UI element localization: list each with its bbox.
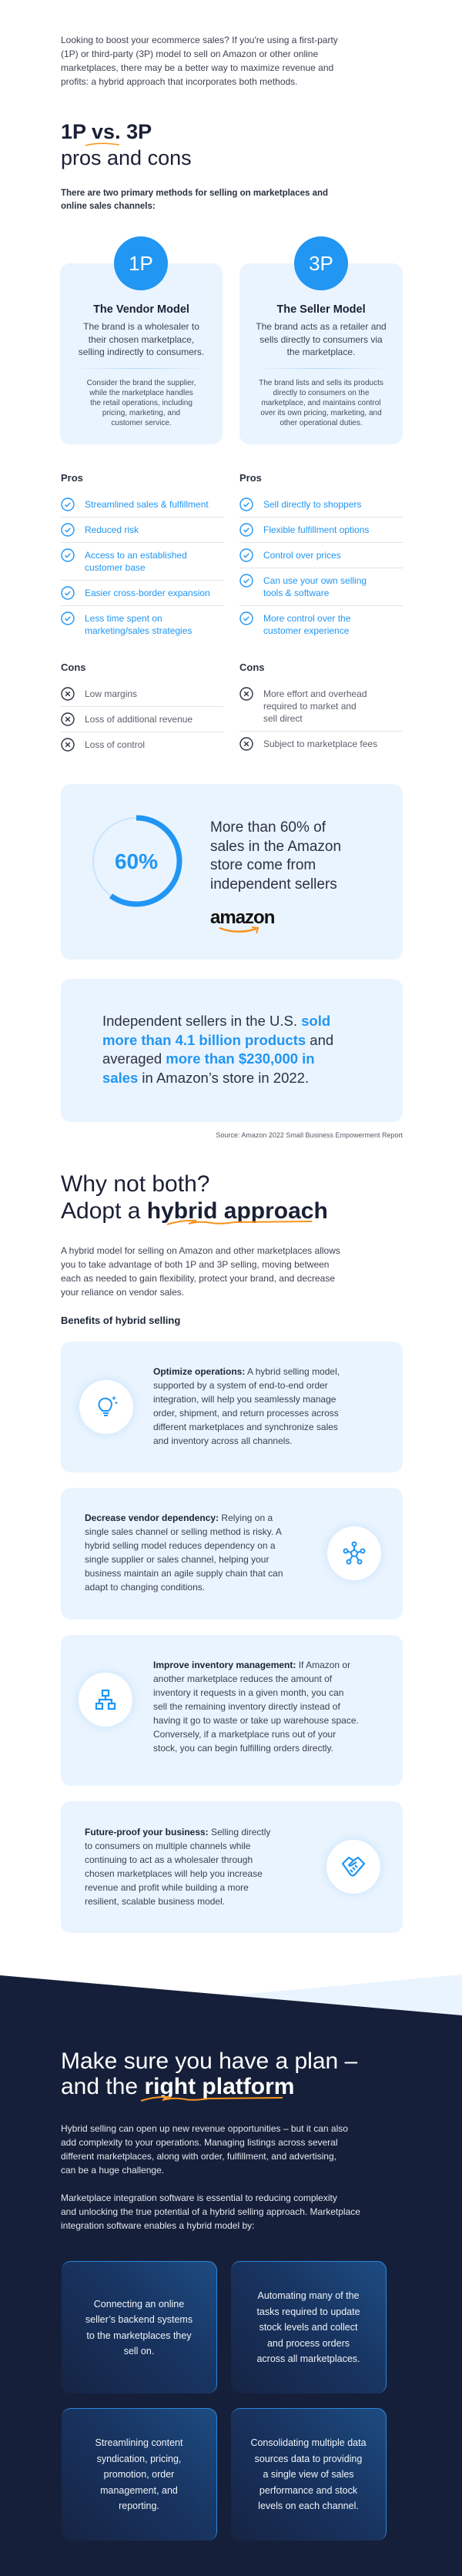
icon: hierarchy xyxy=(79,1673,132,1727)
card: automating tasks: Automating many of the xyxy=(257,2290,360,2301)
badge 1P: 1P xyxy=(129,252,153,275)
text: chosen marketplaces will help you increase xyxy=(85,1868,263,1879)
description: The brand is a wholesaler to xyxy=(83,321,199,332)
intro text: (1P) or third-party (3P) model to sell on Amazon or other online xyxy=(61,49,318,59)
pros list 1P: marketing/sales strategies xyxy=(85,625,192,636)
pros list 1P: Less time spent on xyxy=(85,613,162,624)
card: automating tasks: and process orders xyxy=(267,2338,350,2349)
heading: 1P vs 3P pros and cons: 1P vs. 3P xyxy=(61,120,152,143)
detail: while the marketplace handles xyxy=(89,389,193,397)
detail: the retail operations, including xyxy=(90,399,192,407)
card: consolidating data: sources data to providing xyxy=(255,2454,362,2464)
text: another marketplace reduces the amount of xyxy=(153,1673,332,1684)
stat text: More than 60% of xyxy=(210,819,326,836)
pros list 1P: Reduced risk xyxy=(85,524,139,535)
detail: marketplace, and maintains control xyxy=(261,399,381,407)
text: having it go to waste or take up warehouse space. xyxy=(153,1715,359,1726)
benefits heading: Benefits of hybrid selling xyxy=(61,1315,180,1326)
pros heading 1P: Pros xyxy=(61,472,83,484)
intro text: marketplaces, there may be a better way to maximize revenue and xyxy=(61,62,333,73)
stat card: 60% xyxy=(61,784,403,960)
heading: make sure you have a plan: Make sure you have a plan – xyxy=(61,2048,357,2074)
cons list 1P: Loss of additional revenue xyxy=(85,714,192,725)
description: The brand acts as a retailer and xyxy=(256,321,387,332)
hybrid paragraph: A hybrid model for selling on Amazon and other marketplaces allows xyxy=(61,1245,340,1256)
description: their chosen marketplace, xyxy=(89,334,194,345)
subheading xyxy=(61,189,328,211)
text: supported by a system of end-to-end order xyxy=(153,1380,328,1391)
card: automating tasks: across all marketplaces. xyxy=(256,2353,360,2364)
card: connecting backend: Connecting an online xyxy=(94,2298,184,2309)
detail xyxy=(87,379,196,427)
text xyxy=(85,1827,271,1907)
card: streamlining content: reporting. xyxy=(119,2501,159,2511)
cons heading 1P: Cons xyxy=(61,662,86,673)
cons list 3P: sell direct xyxy=(263,713,303,724)
dark paragraph 1: can be a huge challenge. xyxy=(61,2165,164,2176)
pros list 1P: Streamlined sales & fulfillment xyxy=(85,499,209,510)
text: single sales channel or selling method is risky. A xyxy=(85,1526,282,1537)
card: streamlining content: syndication, pricing, xyxy=(97,2454,181,2464)
detail: over its own pricing, marketing, and xyxy=(260,409,382,417)
squiggle under vs xyxy=(85,143,120,146)
pros list 3P: More control over the xyxy=(263,613,350,624)
text: revenue and profit while building a more xyxy=(85,1882,249,1893)
stat text: independent sellers xyxy=(210,876,337,892)
text: Decrease vendor dependency: Relying on a xyxy=(85,1512,273,1523)
icon: network hub xyxy=(327,1526,381,1580)
heading: make sure you have a plan: and the right platform xyxy=(61,2074,294,2099)
cons list 1P xyxy=(61,687,223,752)
card: consolidating data: performance and stock xyxy=(259,2485,357,2496)
intro text: Looking to boost your ecommerce sales? If you're using a first-party xyxy=(61,35,338,45)
pros list 1P: Access to an established xyxy=(85,550,187,561)
text: business maintain an agile supply chain that can xyxy=(85,1568,283,1579)
text: sell the remaining inventory directly instead of xyxy=(153,1701,340,1712)
card: streamlining content: promotion, order xyxy=(104,2469,174,2480)
text: inventory it requests in a given month, you can xyxy=(153,1687,343,1698)
dark section background xyxy=(0,1975,462,2576)
text: hybrid selling model reduces dependency on a xyxy=(85,1540,276,1551)
text: different marketplaces and synchronize sales xyxy=(153,1422,338,1432)
pros list 3P: Can use your own selling xyxy=(263,575,367,586)
subheading: online sales channels: xyxy=(61,202,156,211)
card: consolidating data: a single view of sales xyxy=(263,2469,354,2480)
text: to consumers on multiple channels while xyxy=(85,1841,250,1851)
card: streamlining content xyxy=(62,2408,217,2541)
text: Improve inventory management: If Amazon or xyxy=(153,1660,350,1670)
benefit card: optimize operations xyxy=(61,1342,403,1472)
icon: handshake xyxy=(326,1840,380,1894)
cons list 1P: Low margins xyxy=(85,688,137,699)
heading: why not both xyxy=(61,1171,328,1225)
intro text xyxy=(61,35,338,87)
panel: 3P seller model xyxy=(239,263,403,444)
description: selling indirectly to consumers. xyxy=(79,347,204,357)
card: connecting backend xyxy=(62,2261,217,2393)
card: streamlining content: Streamlining content xyxy=(95,2437,182,2448)
pros list 3P: Control over prices xyxy=(263,550,341,561)
pros list 3P: Sell directly to shoppers xyxy=(263,499,361,510)
panel: 1P vendor model xyxy=(60,263,223,444)
card: streamlining content: management, and xyxy=(100,2485,178,2496)
text: Optimize operations: A hybrid selling model, xyxy=(153,1366,340,1377)
badge 1P xyxy=(114,236,168,290)
stat card: independent sellers: more than 4.1 billion products and xyxy=(102,1032,333,1047)
card: consolidating data xyxy=(231,2408,387,2541)
text: resilient, scalable business model. xyxy=(85,1896,225,1907)
heading: 1P vs 3P pros and cons: pros and cons xyxy=(61,146,192,169)
stat text: sales in the Amazon xyxy=(210,838,341,855)
subheading: There are two primary methods for selling on marketplaces and xyxy=(61,189,328,198)
stat text: store come from xyxy=(210,857,316,873)
icon: lightbulb xyxy=(79,1380,133,1434)
heading: why not both: Why not both? xyxy=(61,1171,209,1197)
hybrid paragraph: each as needed to gain flexibility, protect your brand, and decrease xyxy=(61,1273,335,1284)
card: consolidating data: Consolidating multiple data xyxy=(250,2437,367,2448)
text: and inventory across all channels. xyxy=(153,1435,293,1446)
hybrid paragraph xyxy=(61,1245,340,1298)
pros list 3P: Flexible fulfillment options xyxy=(263,524,369,535)
dark paragraph 1: different marketplaces, along with order, fulfillment, and advertising, xyxy=(61,2151,336,2162)
dark paragraph 2 xyxy=(61,2192,360,2231)
text: Future-proof your business: Selling directly xyxy=(85,1827,270,1837)
cons heading 3P: Cons xyxy=(239,662,265,673)
heading: make sure you have a plan xyxy=(61,2048,357,2102)
detail: directly to consumers on the xyxy=(273,389,370,397)
dark paragraph 1: Hybrid selling can open up new revenue opportunities – but it can also xyxy=(61,2123,348,2134)
source note: Source: Amazon 2022 Small Business Empowerment Report xyxy=(216,1131,403,1139)
pros list 3P: customer experience xyxy=(263,625,349,636)
stat card: independent sellers: averaged more than $230,000 in xyxy=(102,1050,315,1067)
amazon logo: amazon xyxy=(210,907,274,928)
pros list 1P xyxy=(61,497,223,636)
text xyxy=(153,1660,359,1754)
text: adapt to changing conditions. xyxy=(85,1582,205,1593)
description: sells directly to consumers via xyxy=(259,334,383,345)
intro text: profits: a hybrid approach that incorporates both methods. xyxy=(61,76,298,87)
cons list 3P: required to market and xyxy=(263,701,357,712)
badge 3P: 3P xyxy=(309,252,333,275)
title: The Vendor Model xyxy=(93,303,189,316)
heading: 1P vs 3P pros and cons xyxy=(61,120,192,169)
description xyxy=(256,321,387,357)
card: connecting backend: to the marketplaces they xyxy=(86,2330,192,2341)
stat card: independent sellers xyxy=(61,979,403,1122)
text: stock, you can begin fulfilling orders directly. xyxy=(153,1743,333,1754)
card: automating tasks: stock levels and collect xyxy=(259,2322,357,2333)
pros list 1P: Easier cross-border expansion xyxy=(85,588,210,598)
cons list 3P: More effort and overhead xyxy=(263,688,367,699)
dark paragraph 2: Marketplace integration software is essential to reducing complexity xyxy=(61,2192,337,2203)
ring chart 60%: 60% xyxy=(115,849,158,873)
pros heading 3P: Pros xyxy=(239,472,262,484)
card: consolidating data: levels on each channel. xyxy=(258,2501,359,2511)
text: Conversely, if a marketplace runs out of your xyxy=(153,1729,336,1740)
benefit card: decrease vendor dependency xyxy=(61,1488,403,1620)
stat card: independent sellers: Independent sellers in the U.S. sold xyxy=(102,1013,330,1029)
stat text xyxy=(210,819,341,892)
detail: other operational duties. xyxy=(280,419,363,427)
detail: Consider the brand the supplier, xyxy=(87,379,196,387)
dark paragraph 1: add complexity to your operations. Managing listings across several xyxy=(61,2137,338,2148)
card: connecting backend: sell on. xyxy=(124,2346,154,2357)
squiggle under right platform xyxy=(140,2096,283,2102)
cons list 3P: Subject to marketplace fees xyxy=(263,739,377,749)
card: connecting backend: seller’s backend systems xyxy=(85,2314,192,2325)
title: The Seller Model xyxy=(276,303,366,316)
benefit card: improve inventory management xyxy=(61,1635,403,1786)
cons list 1P: Loss of control xyxy=(85,739,145,750)
description xyxy=(79,321,204,357)
card: automating tasks xyxy=(231,2261,387,2393)
text: continuing to act as a wholesaler through xyxy=(85,1854,253,1865)
text xyxy=(153,1366,340,1446)
hybrid paragraph: you to take advantage of both 1P and 3P selling, moving between xyxy=(61,1259,329,1270)
pros list 1P: customer base xyxy=(85,562,146,573)
detail: The brand lists and sells its products xyxy=(259,379,383,387)
benefit card: future-proof xyxy=(61,1801,403,1933)
pros list 3P: tools & software xyxy=(263,588,329,598)
ring chart 60% xyxy=(92,815,182,907)
text xyxy=(85,1512,283,1593)
card: automating tasks: tasks required to update xyxy=(256,2306,360,2317)
squiggle under hybrid approach xyxy=(166,1220,312,1225)
stat card: independent sellers: sales in Amazon’s store in 2022. xyxy=(102,1069,309,1086)
hybrid paragraph: your reliance on vendor sales. xyxy=(61,1287,184,1298)
description: the marketplace. xyxy=(287,347,355,357)
pros list 3P xyxy=(239,497,403,636)
text: order, shipment, and return processes across xyxy=(153,1408,339,1419)
dark paragraph 1 xyxy=(61,2123,348,2176)
detail: customer service. xyxy=(111,419,172,427)
dark paragraph 2: integration software enables a hybrid model by: xyxy=(61,2220,254,2231)
cons list 3P xyxy=(239,687,403,751)
heading: why not both: Adopt a hybrid approach xyxy=(61,1198,328,1224)
badge 3P xyxy=(294,236,348,290)
text: integration, will help you seamlessly manage xyxy=(153,1394,336,1405)
dark paragraph 2: and unlocking the true potential of a hybrid selling approach. Marketplace xyxy=(61,2206,360,2217)
detail xyxy=(259,379,383,427)
detail: pricing, marketing, and xyxy=(102,409,180,417)
text: single supplier or sales channel, helping your xyxy=(85,1554,269,1565)
